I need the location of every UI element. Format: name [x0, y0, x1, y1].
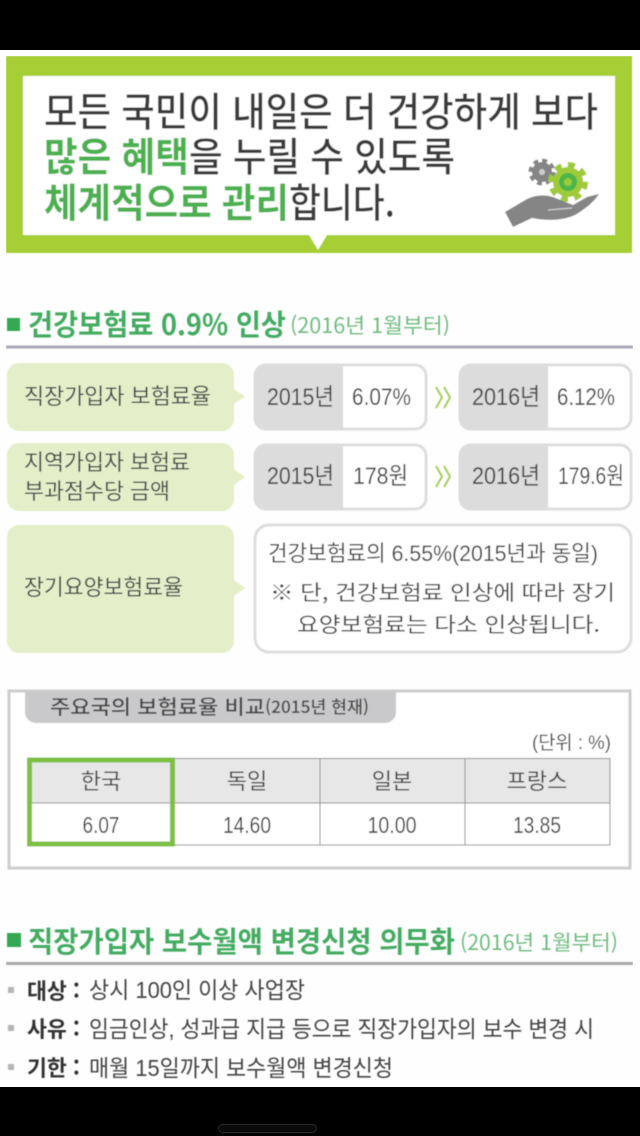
comparison table: 14.60: [223, 812, 271, 838]
label: employee rate: 직장가입자 보험료율: [24, 379, 211, 411]
section heading: reporting obligation: (2016년 1월부터): [460, 927, 618, 957]
section heading: premium increase: (2016년 1월부터): [290, 310, 450, 340]
item: deadline: 기한 :: [27, 1051, 80, 1083]
value pair: 2015 points: 2015년: [267, 463, 334, 490]
panel: country comparison: [9, 691, 630, 868]
home indicator: [218, 1124, 316, 1132]
banner headline: 모든 국민이 내일은 더 건강하게 보다: [44, 80, 598, 138]
value pair: 2016 points: 2016년: [472, 463, 540, 490]
comparison tab heading: 주요국의 보험료율 비교: [50, 691, 265, 720]
note box: 요양보험료는 다소 인상됩니다.: [297, 609, 600, 639]
value pair: 2016 rate: [460, 364, 631, 430]
label: regional points: 지역가입자 보험료: [24, 445, 190, 477]
item: deadline: [8, 1051, 393, 1083]
comparison tab heading: [25, 691, 396, 723]
label: long-term care rate: [7, 525, 245, 653]
banner headline: 합니다.: [289, 171, 395, 229]
section heading: reporting obligation: [6, 919, 633, 965]
banner pointer: [309, 235, 327, 250]
row: long-term care premium: [7, 525, 631, 653]
section heading: reporting obligation: 직장가입자 보수월액 변경신청 의무화: [28, 919, 455, 961]
banner headline: 많은 혜택: [44, 125, 189, 183]
hero banner: [6, 56, 632, 253]
comparison table: 6.07: [82, 812, 120, 838]
arrow: increase: [436, 387, 450, 408]
comparison table: 10.00: [368, 812, 416, 838]
item: deadline: 매월 15일까지 보수월액 변경신청: [89, 1055, 393, 1081]
item: target: [8, 974, 305, 1006]
note box: ※ 단, 건강보험료 인상에 따라 장기: [270, 577, 615, 607]
comparison table: 프랑스: [507, 764, 567, 796]
label: long-term care rate: 장기요양보험료율: [24, 570, 183, 602]
value pair: 2016 rate: 6.12%: [557, 384, 615, 411]
label: regional points: [7, 443, 245, 511]
value pair: 2016 rate: 2016년: [472, 384, 540, 411]
highlight: Korea column: [30, 760, 172, 844]
note box: 건강보험료의 6.55%(2015년과 동일): [268, 541, 598, 566]
label: regional points: 부과점수당 금액: [24, 474, 170, 506]
comparison table: [28, 758, 610, 845]
comparison table: 한국: [81, 764, 121, 796]
comparison table: 일본: [372, 764, 412, 796]
value pair: 2016 points: [460, 444, 631, 510]
section heading: premium increase: 건강보험료 0.9% 인상: [28, 302, 286, 344]
label: employee rate: [7, 363, 245, 431]
value pair: 2016 points: 179.6원: [558, 463, 624, 490]
value pair: 2015 rate: [255, 364, 426, 430]
banner headline: [44, 80, 598, 229]
comparison table: 독일: [227, 764, 267, 796]
comparison table: 13.85: [513, 812, 561, 838]
row: regional premium points: [7, 443, 631, 511]
item: reason: 임금인상, 성과급 지급 등으로 직장가입자의 보수 변경 시: [89, 1016, 594, 1042]
banner headline: 체계적으로 관리: [44, 171, 289, 229]
row: employee premium rate: [7, 363, 631, 431]
unit label: (단위 : %): [532, 732, 611, 754]
item: reason: 사유 :: [27, 1012, 80, 1044]
section heading: premium increase: [6, 302, 633, 348]
comparison tab heading: (2015년 현재): [265, 693, 369, 718]
value pair: 2015 rate: 2015년: [267, 384, 334, 411]
value pair: 2015 points: [255, 444, 426, 510]
item: target: 상시 100인 이상 사업장: [89, 977, 305, 1003]
note box: [255, 525, 631, 652]
item: target: 대상 :: [27, 974, 80, 1006]
icon: gears on a hand: [505, 160, 599, 227]
list: reporting details: [8, 974, 594, 1083]
value pair: 2015 rate: 6.07%: [352, 384, 411, 411]
arrow: increase: [436, 466, 450, 487]
value pair: 2015 points: 178원: [353, 463, 408, 490]
item: reason: [8, 1012, 594, 1044]
banner headline: 을 누릴 수 있도록: [189, 125, 455, 183]
